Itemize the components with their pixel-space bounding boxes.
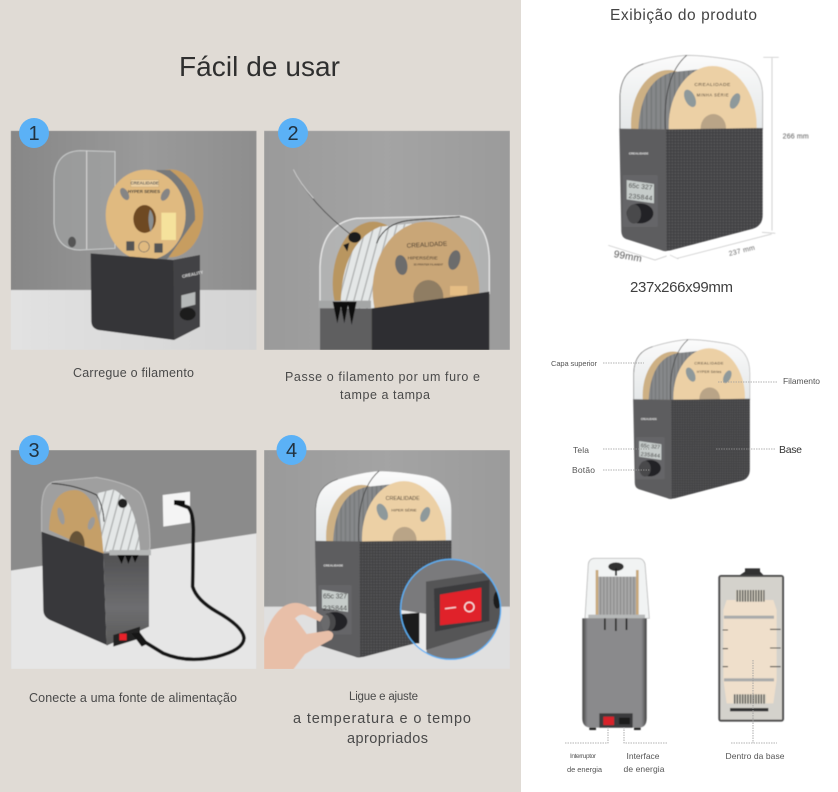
product heading: Exibição do produto — [610, 7, 757, 24]
step 3 photo: connect to power — [11, 450, 257, 669]
device with dimensions: 65c 327 — [628, 182, 653, 192]
device with dimensions: CREALIDADE — [629, 151, 648, 155]
callout: inside of the base: Dentro da base — [726, 751, 785, 761]
step 2 photo: thread the filament and close the lid: HIPERSÉRIE — [408, 254, 438, 261]
part labels: Filamento — [783, 376, 820, 386]
step 4 number badge — [276, 435, 306, 465]
step 4 photo: switch on and adjust — [264, 450, 510, 669]
device with dimensions: MINHA SÉRIE — [697, 93, 729, 98]
step 4 caption: Ligue e ajuste — [349, 691, 418, 703]
title: Fácil de usar — [179, 51, 340, 82]
part labels — [551, 359, 820, 475]
callout: inside of the base — [726, 660, 785, 761]
panel: easy to use steps — [11, 51, 510, 747]
callouts: power switch and power interface: Interruptor — [570, 753, 597, 760]
step 3 number badge — [19, 435, 49, 465]
back view of device — [582, 558, 649, 730]
callouts: power switch and power interface — [564, 727, 667, 774]
device illustration: 65c 327 — [640, 443, 660, 451]
step 1 caption: Carregue o filamento — [73, 366, 194, 380]
part labels: Base — [779, 444, 802, 456]
panel: product display — [551, 7, 820, 774]
device illustration: HYPER Séries — [697, 370, 722, 374]
step 4 photo: switch on and adjust: 65c 327 — [323, 594, 347, 601]
step 2 number badge — [278, 118, 308, 148]
device with dimensions — [608, 55, 809, 265]
step 4 caption: a temperatura e o tempo — [293, 711, 471, 727]
step 1 photo: load the filament: HYPER SERIES — [128, 189, 160, 194]
step 1 number badge: 1 — [28, 123, 40, 145]
inside of the base — [718, 568, 784, 722]
callouts: power switch and power interface: de energia — [567, 765, 603, 774]
step 2 number badge: 2 — [287, 123, 299, 145]
step 4 caption — [293, 691, 471, 747]
callouts: power switch and power interface: Interface — [626, 751, 660, 761]
device with dimensions: 266 mm — [783, 134, 809, 141]
part labels: Tela — [573, 445, 589, 455]
background: left beige panel — [0, 0, 521, 792]
part labels: Botão — [572, 465, 595, 475]
device with dimensions: 99mm — [613, 249, 643, 265]
device illustration: CREALIDADE — [641, 418, 657, 421]
step 4 photo: switch on and adjust: CREALIDADE — [386, 496, 420, 502]
step 4 number badge: 4 — [286, 440, 297, 462]
step 4 caption: apropriados — [347, 731, 428, 747]
device illustration: CREALIDADE — [694, 361, 724, 366]
part labels: Capa superior — [551, 359, 598, 368]
dimensions text: 237x266x99mm — [630, 279, 733, 296]
device with parts labels — [551, 340, 820, 499]
step 2 photo: thread the filament and close the lid: CREALIDADE — [407, 241, 447, 250]
device with dimensions: 235844 — [628, 193, 653, 203]
step 3 number badge: 3 — [28, 440, 40, 462]
step 1 number badge — [19, 118, 49, 148]
step 4 photo: switch on and adjust: 235844 — [323, 605, 347, 612]
step 2 caption: tampe a tampa — [340, 388, 430, 402]
device illustration — [633, 340, 750, 499]
device with dimensions: 237 mm — [728, 245, 756, 258]
step 2 caption: Passe o filamento por um furo e — [285, 370, 480, 384]
callouts: power switch and power interface: de energia — [624, 764, 665, 774]
step 4 photo: switch on and adjust: HIPER SÉRIE — [391, 508, 417, 513]
step 1 photo: load the filament: CREALIDADE — [130, 181, 159, 186]
step 1 photo: load the filament — [11, 131, 257, 350]
device with dimensions: CREALIDADE — [694, 82, 731, 88]
step 3 caption: Conecte a uma fonte de alimentação — [29, 691, 237, 705]
step 2 photo: thread the filament and close the lid — [264, 131, 510, 358]
device illustration: 235844 — [640, 452, 660, 460]
step 2 photo: thread the filament and close the lid: 3D PRINTER FILAMENT — [413, 262, 444, 266]
step 4 photo: switch on and adjust: CREALIDADE — [324, 563, 343, 567]
step 1 photo: load the filament: CREALITY — [181, 270, 204, 279]
step 2 caption — [285, 370, 480, 402]
